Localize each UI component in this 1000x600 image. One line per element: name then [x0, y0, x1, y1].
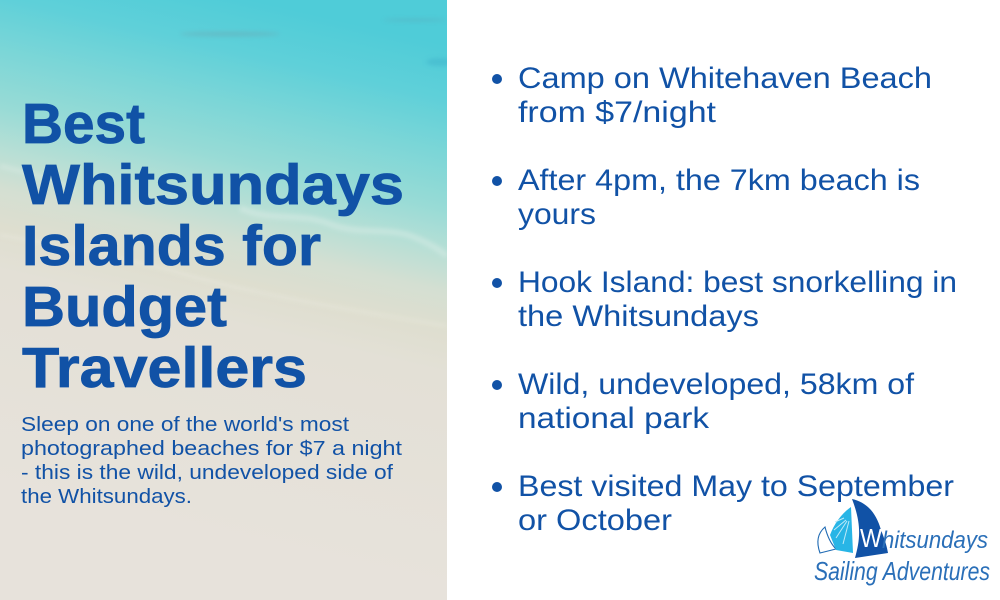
bullet: camp on Whitehaven: from $7/night [518, 96, 716, 129]
bullet: wild and undeveloped [492, 368, 915, 435]
intro paragraph: - this is the wild, undeveloped side of [21, 461, 393, 484]
bullet: best time to visit: or October [518, 504, 672, 537]
bullet: wild and undeveloped: Wild, undeveloped, 58km of [518, 368, 915, 401]
bullet: wild and undeveloped: national park [518, 402, 709, 435]
bullet: Hook Island: the Whitsundays [518, 300, 759, 333]
intro paragraph: the Whitsundays. [21, 485, 192, 508]
bullet: camp on Whitehaven: Camp on Whitehaven Beach [518, 62, 932, 95]
bullet: best time to visit [492, 470, 954, 537]
title: Islands for [22, 214, 321, 278]
icon: dark blue sail [852, 499, 888, 558]
intro paragraph [21, 413, 402, 508]
logo wordmark: hitsundays: hitsundays [882, 527, 988, 554]
panel: beach photo background [0, 0, 454, 600]
icon: light blue sail [830, 507, 853, 553]
title [22, 92, 404, 400]
bullet: after 4pm: yours [518, 198, 596, 231]
intro paragraph: Sleep on one of the world's most [21, 413, 349, 436]
bullet: best time to visit: Best visited May to September [518, 470, 954, 503]
bullet: Hook Island: Hook Island: best snorkelling in [518, 266, 957, 299]
panel: bullet list [492, 62, 957, 537]
icon: sun rays on light sail [834, 518, 849, 544]
bullet: Hook Island [492, 266, 957, 333]
title: Budget [22, 275, 227, 339]
logo wordmark: W: W [860, 523, 882, 553]
bullet: after 4pm [492, 164, 920, 231]
title: Travellers [22, 336, 307, 400]
icon: white outlined sail [818, 527, 836, 553]
bullet: camp on Whitehaven [492, 62, 932, 129]
intro paragraph: photographed beaches for $7 a night [21, 437, 402, 460]
logo: Whitsundays Sailing Adventures [814, 499, 990, 586]
title: Whitsundays [22, 153, 404, 217]
title: Best [22, 92, 145, 156]
bullet: after 4pm: After 4pm, the 7km beach is [518, 164, 920, 197]
